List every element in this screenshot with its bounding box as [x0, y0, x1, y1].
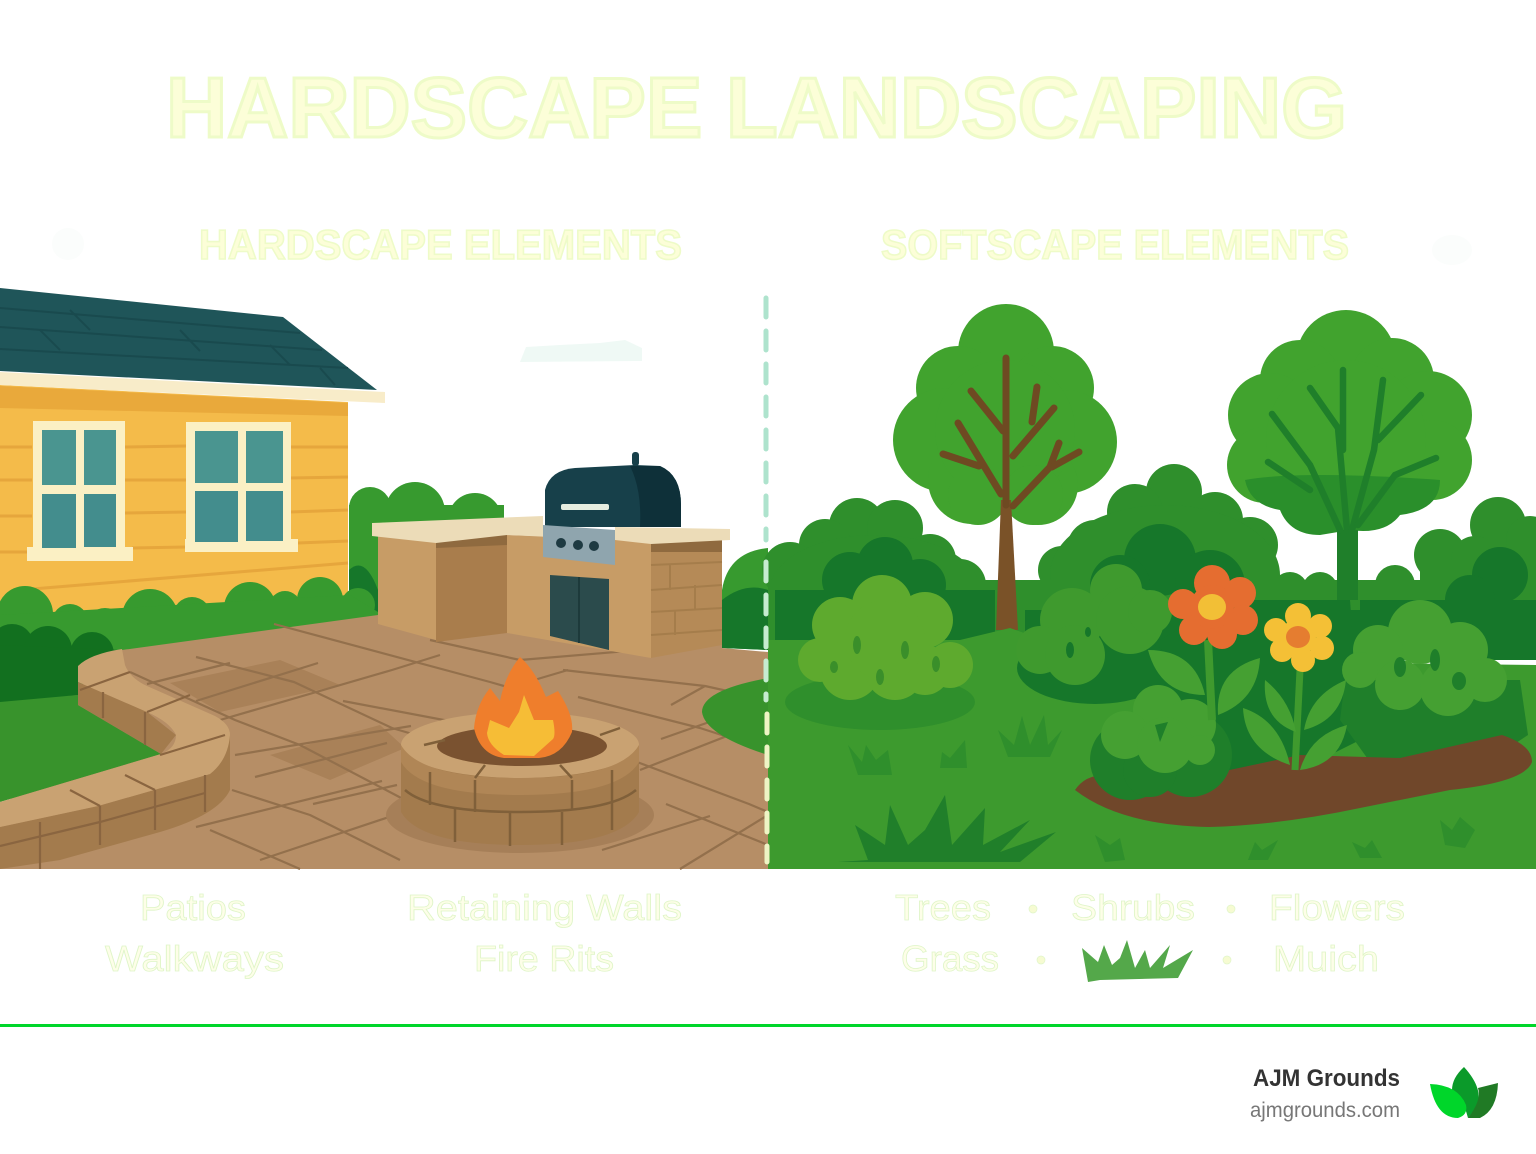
tree right trunk [1268, 370, 1436, 600]
shrub light shadow [785, 674, 975, 730]
caption: retaining walls: Retaining Walls [407, 887, 682, 928]
window left [27, 421, 133, 561]
caption: mulch: Muich [1273, 938, 1379, 979]
footer rule [0, 1024, 1536, 1027]
outdoor kitchen base [378, 535, 722, 658]
counter top [372, 516, 730, 544]
caption: shrubs: Shrubs [1071, 887, 1195, 928]
panel: softscape scene [762, 304, 1536, 869]
caption separator dots [1029, 905, 1235, 964]
icon: grass tuft [1082, 940, 1193, 982]
back hedge [349, 482, 504, 610]
flower orange [1148, 565, 1260, 720]
footer brand name: AJM Grounds [1253, 1065, 1400, 1092]
faint artifact left [52, 228, 84, 260]
footer website: ajmgrounds.com [1250, 1099, 1400, 1122]
dark planting backdrop [1160, 600, 1360, 790]
lawn [768, 628, 1536, 869]
large grass tuft [838, 795, 1056, 862]
house wall [0, 385, 348, 640]
flower yellow [1243, 603, 1347, 770]
tree left trunk [943, 358, 1079, 630]
shrub right [1340, 600, 1528, 762]
divider dashed line [766, 298, 767, 862]
retaining wall [0, 649, 230, 869]
back hedge [762, 464, 1536, 655]
title: HARDSCAPE LANDSCAPING [166, 61, 1347, 156]
shrub middle [1016, 564, 1173, 704]
faint artifact right [1432, 235, 1472, 265]
roof [0, 288, 377, 390]
cabinet door [550, 575, 609, 650]
fire pit [386, 712, 654, 853]
shrub light [798, 575, 973, 700]
roof fascia [0, 372, 385, 403]
caption: walkways: Walkways [105, 938, 284, 979]
tree right canopy [1227, 310, 1472, 535]
patio paving [0, 612, 768, 869]
panel: hardscape scene [0, 288, 768, 869]
caption: grass: Grass [901, 938, 999, 979]
tree left canopy [893, 304, 1117, 525]
caption: trees: Trees [895, 887, 991, 928]
mulch bed [1075, 735, 1532, 827]
right background bush [722, 548, 768, 650]
faint cloud [520, 340, 642, 362]
heading: softscape elements: SOFTSCAPE ELEMENTS [881, 221, 1349, 268]
grill hood [545, 452, 681, 527]
caption: fire pits: Fire Rits [474, 938, 614, 979]
front hedge [0, 577, 378, 660]
small grass tufts [848, 715, 1475, 862]
dark hedge left [0, 624, 120, 702]
heading: hardscape elements: HARDSCAPE ELEMENTS [199, 221, 682, 268]
grill control panel [543, 525, 615, 565]
window right [185, 422, 298, 552]
dark back hedge [349, 566, 378, 620]
flame [474, 657, 572, 758]
shrub front [1090, 685, 1232, 800]
caption: patios: Patios [140, 887, 246, 928]
right lawn patch [702, 678, 768, 755]
icon: logo leaves [1430, 1067, 1498, 1118]
dark hedge [775, 524, 1536, 660]
lawn left [0, 695, 161, 802]
caption: flowers: Flowers [1269, 887, 1405, 928]
